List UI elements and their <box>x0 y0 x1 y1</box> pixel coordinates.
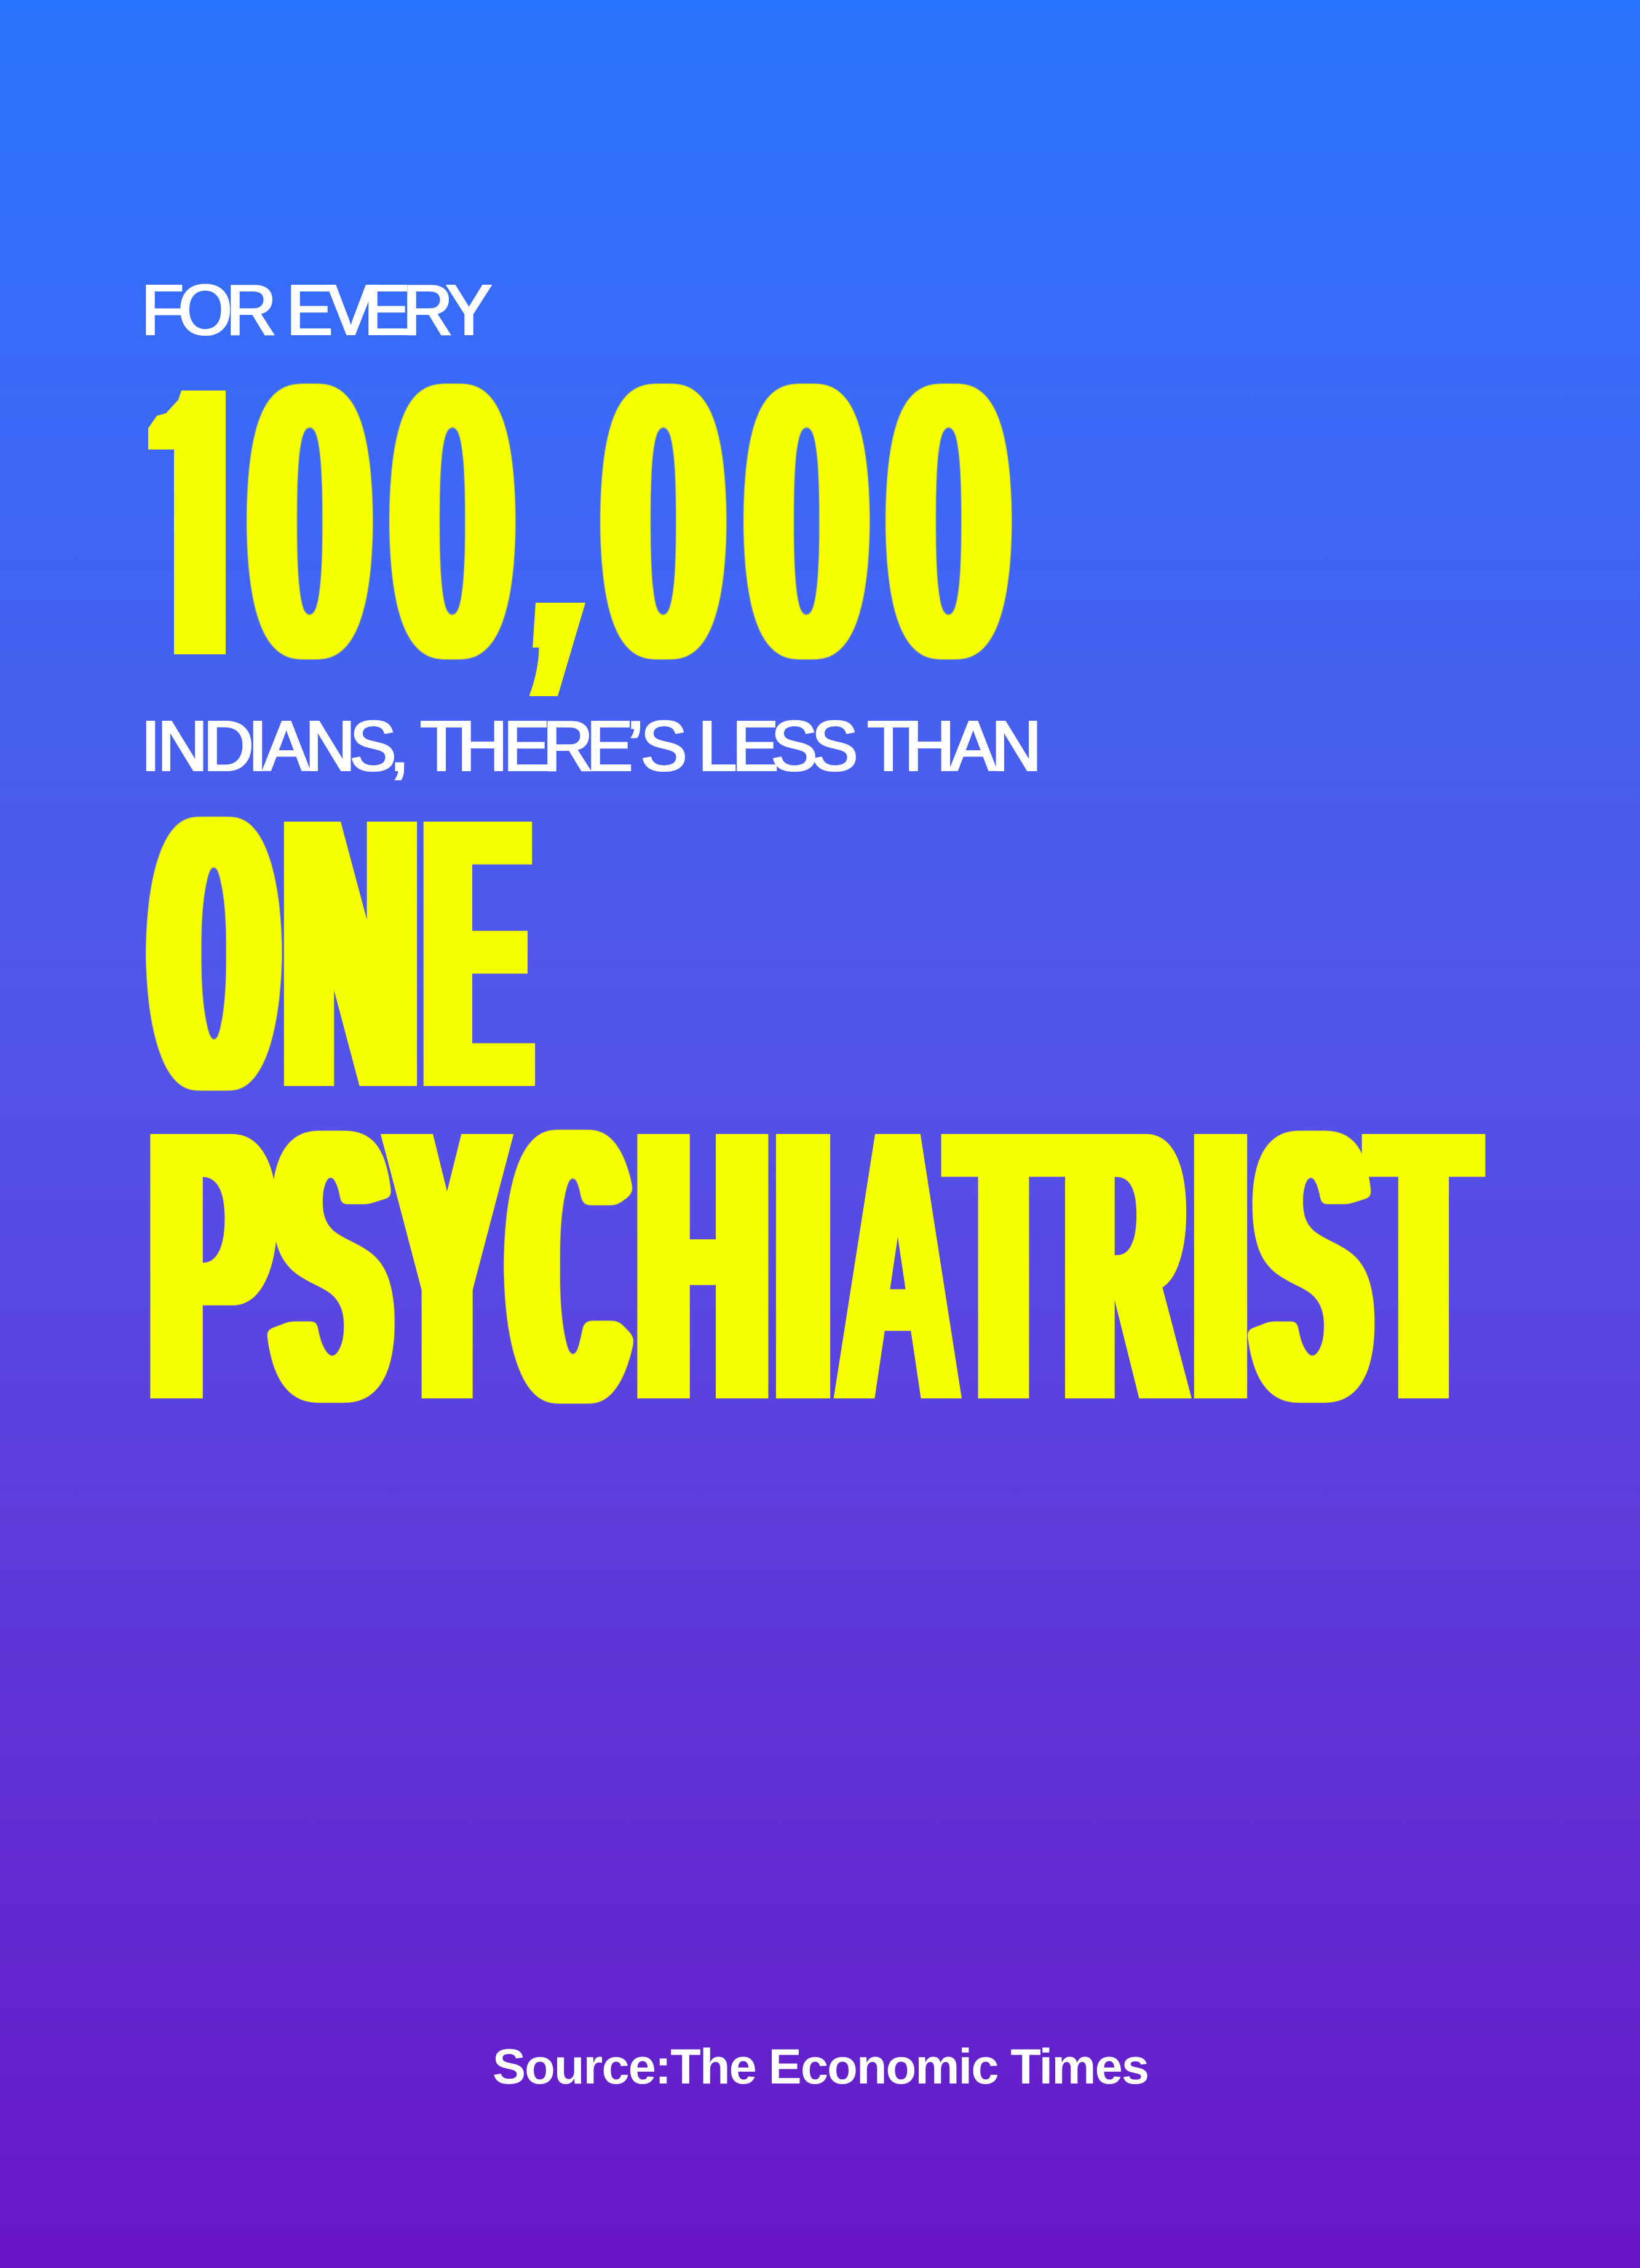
big word: psychiatrist: S <box>275 1052 388 1481</box>
big word: psychiatrist <box>152 1036 1473 1496</box>
big word: psychiatrist: T <box>1374 1050 1473 1480</box>
big number: 100,000: 0 <box>601 295 726 747</box>
lead text: indians, there's less than: INDIANS, THERE’S LESS THAN <box>141 707 1042 786</box>
big number: 100,000: 0 <box>390 295 515 747</box>
big number: 100,000: , <box>535 355 579 716</box>
big word: psychiatrist: T <box>953 1051 1054 1481</box>
lead text: for every: FOR EVERY <box>141 271 492 350</box>
big word: one: E <box>427 738 528 1168</box>
big number: 100,000: 1 <box>151 308 244 737</box>
source credit: Source:The Economic Times <box>493 2039 1149 2095</box>
big number: 100,000: 0 <box>887 295 1011 747</box>
big word: one: O <box>157 723 271 1183</box>
big number: 100,000: 0 <box>248 295 372 747</box>
big word: psychiatrist: C <box>515 1036 624 1496</box>
big number: 100,000 <box>151 295 1011 747</box>
big word: psychiatrist: I <box>777 1051 830 1480</box>
big word: psychiatrist: I <box>1195 1052 1246 1480</box>
big word: psychiatrist: P <box>152 1052 270 1481</box>
big word: psychiatrist: R <box>1068 1052 1181 1481</box>
big word: one <box>157 723 528 1183</box>
big word: one: N <box>285 739 416 1168</box>
big word: psychiatrist: A <box>838 1051 957 1480</box>
big number: 100,000: 0 <box>745 295 869 747</box>
big word: psychiatrist: H <box>639 1052 767 1481</box>
big word: psychiatrist: S <box>1256 1052 1368 1481</box>
big word: psychiatrist: Y <box>391 1052 503 1481</box>
